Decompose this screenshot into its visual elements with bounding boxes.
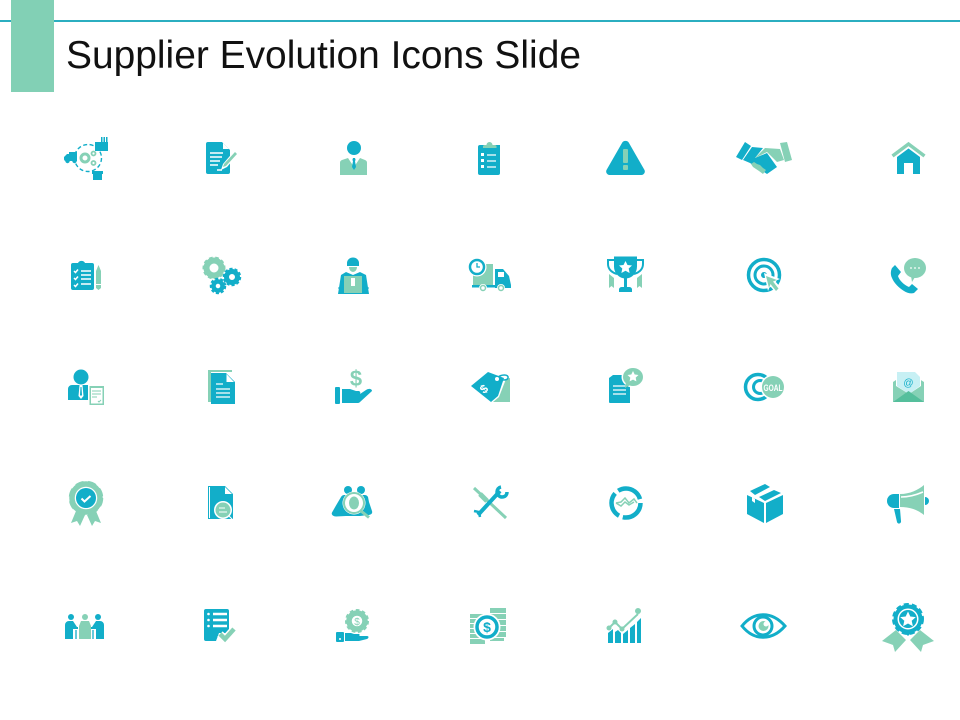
icon: open envelope (893, 372, 924, 402)
icon: document search (208, 486, 235, 522)
icon: businessman (340, 141, 367, 175)
icon: list with check (204, 609, 234, 641)
icon: checklist clipboard (478, 142, 500, 175)
icon: home (892, 144, 924, 174)
icon: warning triangle (606, 141, 645, 175)
icon: price tag: $ (477, 381, 491, 397)
icon: document with star bubble (609, 366, 644, 403)
icon: target with cursor (748, 260, 781, 293)
icon: goal target: GOAL (764, 383, 783, 393)
icon: package box (747, 484, 783, 523)
icon: document with pencil (206, 142, 239, 174)
icon: business meeting (65, 614, 104, 639)
icon: clipboard and pencil (71, 261, 101, 290)
icon: cycle ring (612, 488, 640, 518)
icon: person with report (68, 370, 105, 406)
icon: crossed tools (474, 487, 507, 518)
title: Supplier Evolution Icons Slide (66, 34, 581, 77)
icon: award medal (882, 604, 934, 652)
icon: trophy (608, 256, 643, 292)
icon: people search (332, 486, 372, 518)
icon: hand with dollar gear: $ (354, 617, 360, 628)
icon: dollar coin stacks (470, 608, 506, 644)
icon: handshake (736, 142, 792, 174)
icon: certified badge (70, 482, 102, 526)
icon: megaphone (887, 485, 929, 524)
icon: open envelope: @ (903, 378, 914, 389)
icon: hand with dollar (335, 366, 372, 404)
accent tab (11, 0, 54, 92)
icon: dollar coin stacks: $ (483, 619, 491, 635)
icon: supply network (64, 137, 108, 180)
icon: goal target (746, 374, 786, 400)
icon: eye (742, 615, 785, 637)
header rule (0, 20, 960, 22)
icon: delivery truck with clock (468, 258, 511, 292)
icon: phone with speech bubble (891, 258, 926, 293)
icon: hand with dollar gear (336, 610, 368, 642)
icon: growth chart (606, 608, 641, 643)
icon: stacked documents (208, 370, 235, 404)
icon: hand with dollar: $ (350, 366, 362, 391)
icon: delivery worker (338, 258, 369, 294)
icon: gears (204, 258, 240, 293)
icon: price tag (471, 372, 510, 402)
